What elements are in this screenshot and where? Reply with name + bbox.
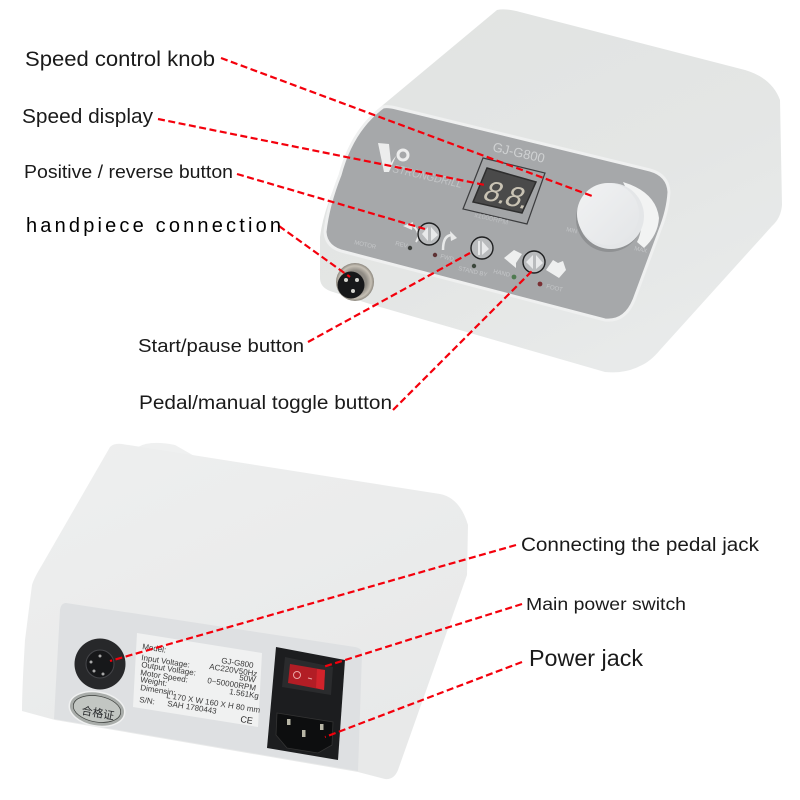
speed display: 8.8.	[478, 176, 537, 215]
label: main power switch: Main power switch	[526, 594, 686, 614]
label: pedal/manual toggle button: Pedal/manual toggle button	[139, 393, 392, 414]
device: rear view	[22, 443, 468, 779]
specification label: 50W	[239, 673, 257, 685]
specification label: SAH 1780443	[167, 699, 218, 716]
top knob edge	[138, 443, 196, 457]
device: front view	[320, 9, 782, 372]
specification label: L 170 X W 160 X H 80 mm	[166, 691, 261, 715]
pedal jack	[74, 638, 126, 690]
leader lines	[110, 58, 592, 737]
start / pause button: STAND BY	[458, 266, 488, 279]
positive / reverse button: FWD	[440, 254, 455, 263]
logo: STRONGDRILL	[391, 163, 463, 191]
label: speed display: Speed display	[22, 106, 153, 128]
pedal / manual toggle button: FOOT	[546, 284, 563, 294]
main power switch	[282, 657, 333, 695]
specification label: GJ-G800	[221, 656, 255, 670]
rear body	[22, 444, 468, 779]
start / pause button	[458, 237, 493, 279]
power jack	[276, 713, 333, 753]
knob scale labels: MAX	[634, 246, 648, 255]
speed display	[463, 158, 545, 224]
pedal / manual toggle button: HAND	[493, 269, 511, 279]
specification label: Output Voltage:	[141, 660, 197, 678]
pedal / manual toggle button	[493, 250, 566, 294]
specification label: S/N:	[139, 695, 155, 706]
specification label: 0~50000RPM	[207, 676, 257, 693]
logo	[378, 143, 463, 191]
specification label: 1.561Kg	[229, 687, 260, 701]
specification label: Input Voltage:	[141, 653, 190, 670]
specification label	[133, 633, 262, 727]
label: positive / reverse button: Positive / reverse button	[24, 162, 233, 182]
model name: GJ-G800	[491, 139, 546, 166]
front control panel	[325, 107, 669, 320]
handpiece connector	[336, 263, 374, 301]
label: speed control knob: Speed control knob	[25, 48, 215, 71]
positive / reverse button: REV	[395, 241, 408, 250]
positive / reverse button	[395, 222, 457, 263]
certificate seal: 合格证	[80, 703, 115, 723]
specification label: Model:	[142, 642, 167, 655]
specification label: Dimensin:	[140, 683, 176, 698]
specification label: CE	[240, 714, 254, 726]
label: handpiece connection: handpiece connection	[26, 215, 281, 237]
motor label: MOTOR	[354, 240, 377, 251]
power module	[267, 647, 345, 760]
rear recessed panel	[54, 603, 362, 771]
knob	[576, 182, 659, 252]
label: connecting the pedal jack: Connecting the pedal jack	[521, 535, 760, 556]
certificate seal	[66, 687, 128, 731]
rpm label: x1000RPM	[474, 212, 509, 227]
knob scale labels	[566, 227, 648, 255]
label: start/pause button: Start/pause button	[138, 336, 304, 356]
knob scale labels: MIN	[566, 227, 578, 235]
specification label: AC220V50Hz	[209, 662, 258, 679]
device body	[320, 9, 782, 372]
specification label: Motor Speed:	[140, 668, 189, 684]
specification label: Weight:	[140, 675, 168, 688]
label: power jack: Power jack	[529, 645, 644, 671]
